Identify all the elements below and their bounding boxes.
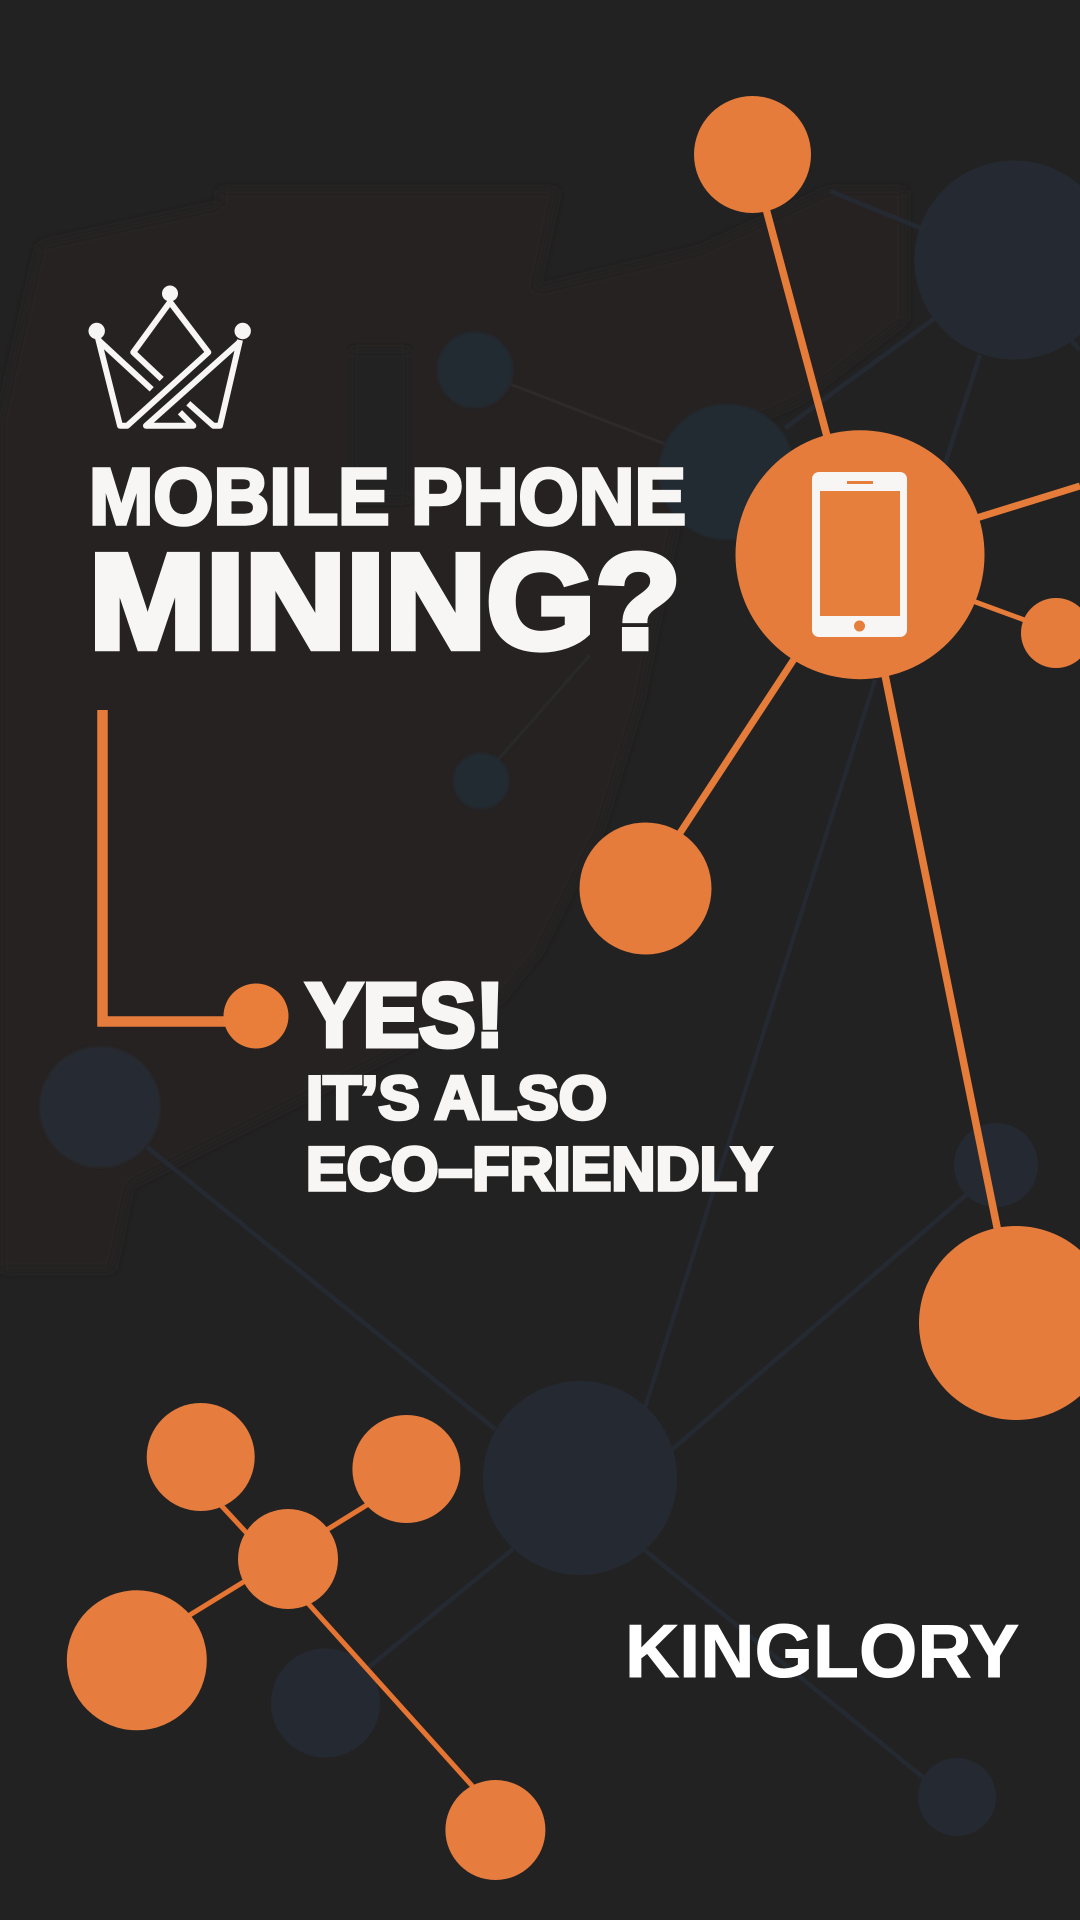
answer line 3: ECO–FRIENDLY	[306, 1135, 772, 1203]
icon: smartphone	[812, 472, 907, 637]
title line 1: MOBILE PHONE	[89, 452, 686, 541]
title	[89, 452, 686, 677]
elbow connector with orange dot	[102, 710, 288, 1048]
answer text	[306, 966, 772, 1203]
answer headline: YES!	[306, 966, 504, 1066]
brand name: KINGLORY	[625, 1609, 1019, 1693]
answer line 2: IT’S ALSO	[306, 1064, 607, 1132]
background network lines	[147, 191, 1080, 1805]
title line 2: MINING?	[89, 526, 681, 677]
network: lower left orange cluster	[67, 1403, 545, 1880]
network: phone hub with orange nodes	[580, 96, 1080, 1420]
cluster nodes	[67, 1403, 545, 1880]
faint brown background texture	[0, 190, 905, 1270]
cluster connector lines	[180, 1500, 475, 1789]
orange nodes	[580, 96, 1080, 1420]
connector lines	[680, 205, 1080, 1232]
icon: crown logo	[88, 286, 251, 426]
